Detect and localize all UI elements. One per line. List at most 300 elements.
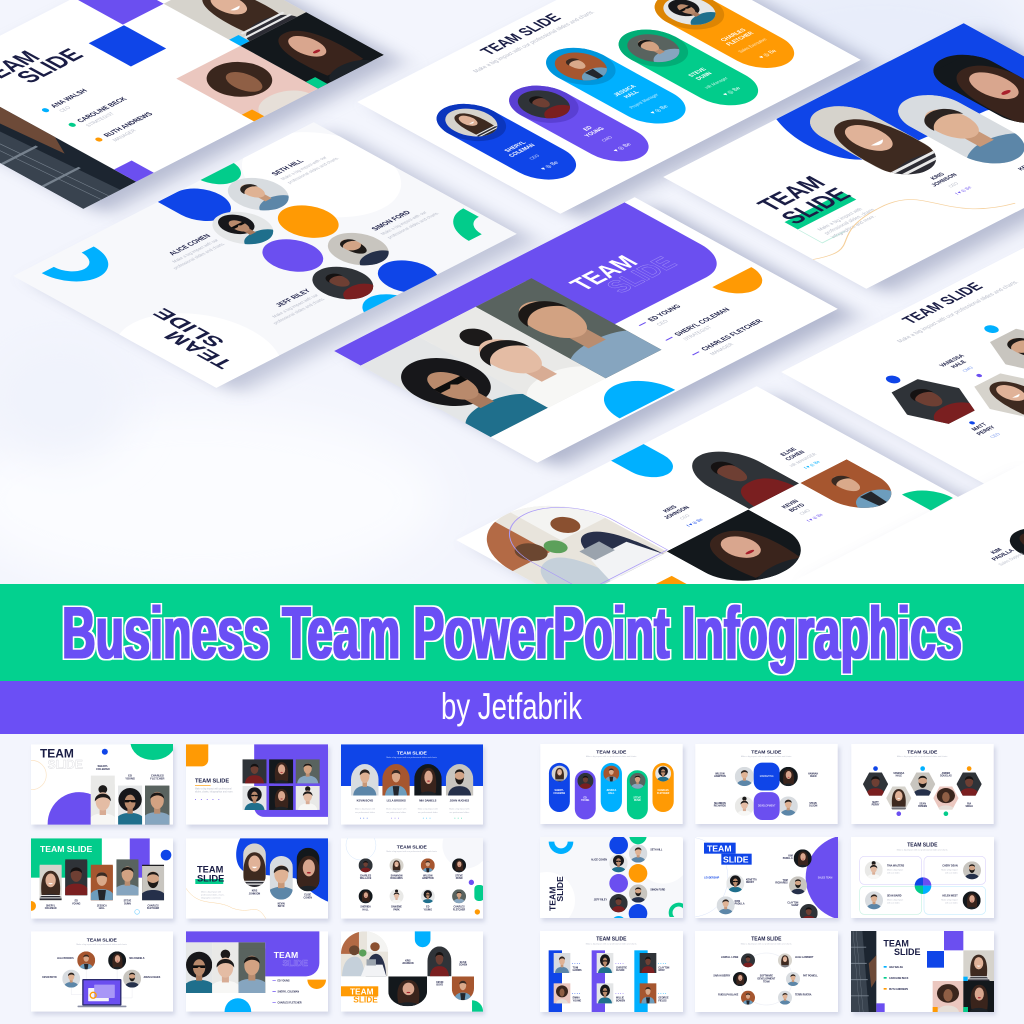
orange label bbox=[594, 576, 696, 629]
thumbnail: L3: TEAM SLIDE bbox=[397, 750, 428, 756]
pill orange bbox=[654, 0, 794, 68]
thumbnail: R8: DEVELOPMENT bbox=[757, 979, 776, 981]
thumbnail: R7: CLAYTON bbox=[658, 966, 670, 969]
thumbnail: L5: Make a big impact with bbox=[201, 890, 221, 893]
thumbnail: R1: HALL bbox=[608, 792, 615, 795]
names bbox=[894, 353, 1024, 441]
name labels: professional slides and charts. bbox=[386, 211, 440, 239]
thumbnail: R7: •••• bbox=[658, 992, 668, 996]
names: CMO bbox=[798, 508, 812, 516]
thumbnail: R3: DOUGLAS bbox=[940, 775, 952, 778]
thumbnail: L1 bbox=[17, 723, 216, 864]
thumbnail: R6: SEAN BAIRD bbox=[887, 895, 902, 898]
thumbnail: R1: ED bbox=[584, 797, 587, 799]
thumbnail: R2: TEAM SLIDE bbox=[751, 749, 782, 755]
photo dark circle bbox=[998, 522, 1024, 565]
thumbnail: R2: WILSON bbox=[715, 774, 725, 776]
description: Make a big impact with bbox=[816, 207, 865, 232]
name labels: professional slides and charts. bbox=[286, 156, 341, 184]
purple panel bbox=[334, 202, 717, 366]
thumbnail: L2 bbox=[186, 744, 330, 828]
thumbnail: R6: Make a big impact bbox=[941, 868, 958, 871]
thumbnail: L9: KEVIN bbox=[436, 982, 444, 984]
thumbnail: R7: CHRISTIE bbox=[616, 967, 627, 969]
thumbnail: R5: KIM bbox=[788, 855, 793, 857]
heading team slide rotated: TEAM bbox=[159, 328, 238, 371]
thumbnail: R7 bbox=[540, 931, 685, 1015]
thumbnail: R9: SLIDE bbox=[894, 947, 921, 957]
name labels: SETH HILL bbox=[271, 158, 307, 177]
names: VANESSA bbox=[939, 353, 967, 368]
slide: hexagon team bbox=[781, 216, 1024, 492]
thumbnail: R4: SETH HILL bbox=[650, 850, 663, 852]
thumbnail: R7: •••• bbox=[572, 961, 582, 965]
team list: ANA WALSH bbox=[49, 88, 90, 109]
thumbnail: R3: VANESSA bbox=[893, 772, 905, 775]
heading: SLIDE bbox=[775, 185, 858, 228]
thumbnail: R8: PAT POWELL bbox=[803, 975, 818, 978]
name labels: SIMON FORD bbox=[371, 210, 413, 232]
thumbnail: R2: Make a big impact with our professional slides and charts. bbox=[741, 755, 792, 758]
thumbnail: R1: YOUNG bbox=[581, 800, 590, 802]
purple square top bbox=[74, 0, 164, 25]
thumbnail: R1: TEAM SLIDE bbox=[596, 749, 627, 755]
thumbnail: L5: KRIS bbox=[252, 891, 258, 893]
thumbnail: L5: COHEN bbox=[304, 897, 312, 899]
slide: bottom right partial bbox=[790, 463, 1024, 595]
thumbnail: R5: REDDY bbox=[746, 882, 755, 884]
pill purple: ED bbox=[582, 126, 595, 132]
pill green: ♥ ◎ Be bbox=[722, 86, 743, 97]
thumbnail: R6: Make a big impact with our professional slides and charts. bbox=[897, 848, 948, 851]
thumbnail: R8: TEAM bbox=[763, 981, 770, 984]
thumbnail: R9 bbox=[850, 931, 996, 1015]
hexagon photos bbox=[876, 321, 1024, 451]
thumbnail: L6: CHARLES bbox=[453, 906, 465, 909]
names: HALE bbox=[950, 360, 969, 369]
role list: ED YOUNG bbox=[647, 304, 683, 323]
thumbnail: R3: BOWEN bbox=[918, 806, 927, 808]
thumbnail: L3: our professional slides bbox=[418, 811, 438, 814]
team list: MANAGER bbox=[112, 129, 139, 143]
thumbnail: R6: TINA WALTERS bbox=[887, 865, 905, 868]
thumbnail: L2: TEAM SLIDE bbox=[195, 779, 229, 785]
green ring bbox=[453, 208, 482, 241]
thumbnail: L9: BOYD bbox=[436, 985, 443, 987]
thumbnail: R7: YOUNG bbox=[573, 1000, 581, 1002]
name labels: KRIS bbox=[930, 172, 947, 181]
thumbnail: L5: SLIDE bbox=[197, 874, 224, 884]
heading: TEAM SLIDE bbox=[898, 280, 988, 327]
blue square bbox=[89, 25, 166, 66]
names bbox=[656, 442, 879, 559]
names: KEVIN bbox=[781, 499, 801, 510]
photo dark hair woman bbox=[240, 12, 384, 89]
thumbnail: L4: TEAM SLIDE bbox=[40, 844, 92, 854]
thumbnail: L4: SHERYL bbox=[46, 905, 56, 907]
thumbnail: L9: SLIDE bbox=[353, 994, 378, 1004]
thumbnail: L4 bbox=[0, 827, 204, 935]
pill green bbox=[618, 30, 758, 106]
thumbnail: R3: PERRY bbox=[872, 805, 880, 807]
thumbnail: L1: TEAM bbox=[40, 747, 74, 761]
team list: CAROLINE BECK bbox=[76, 96, 129, 124]
thumbnail: L9: COHEN bbox=[459, 965, 468, 967]
thumbnail: R5: TOM bbox=[783, 880, 788, 882]
thumbnail: L1: SLIDE bbox=[48, 757, 83, 771]
pill green: DUNN bbox=[695, 71, 714, 81]
pill cyan: JESSICA bbox=[613, 84, 639, 98]
thumbnail: L6: RICHARDS bbox=[390, 877, 403, 880]
name labels: Make a big impact with our bbox=[279, 155, 328, 181]
pill blue: COLEMAN bbox=[508, 143, 537, 158]
thumbnail: R8: RUDOLPH BLAKE bbox=[718, 993, 739, 996]
thumbnail: L8: ED YOUNG bbox=[277, 980, 290, 982]
thumbnail: R6: with our slides bbox=[945, 871, 958, 874]
role list bbox=[637, 289, 773, 362]
name labels: JOHNSON bbox=[931, 173, 959, 188]
thumbnail: R4: TEAM bbox=[548, 886, 558, 911]
thumbnail: L6: WILSON bbox=[423, 875, 433, 877]
photo man arch bbox=[675, 442, 799, 509]
thumbnail: L2: slides, charts, infographics and more. bbox=[195, 790, 234, 793]
photo curly hair man bbox=[361, 336, 548, 437]
photo brick arch bbox=[800, 459, 907, 516]
thumbnail: L4: YOUNG bbox=[72, 903, 81, 905]
thumbnail: L3: ••• bbox=[360, 816, 370, 820]
thumbnail: L1: COLEMAN bbox=[96, 767, 110, 771]
name labels: Make a big impact with our bbox=[171, 238, 220, 263]
pill cyan: HALL bbox=[623, 90, 642, 99]
thumbnail: R5: SHAW bbox=[791, 904, 799, 907]
thumbnail: R7: TEAM SLIDE bbox=[596, 937, 627, 943]
thumbnail: L6: SHANNON bbox=[391, 874, 403, 877]
outline arch bbox=[483, 494, 667, 592]
thumbnail: L8: CHARLES FLETCHER bbox=[277, 1001, 302, 1004]
thumbnail: R1: Make a big impact with our professional slides and charts. bbox=[586, 755, 637, 758]
names: f ♥ ◎ Be bbox=[685, 517, 704, 527]
thumbnail: R1: STEVE bbox=[633, 797, 641, 799]
thumbnail: L3: LELA BROOKS bbox=[387, 799, 406, 803]
thumbnail: L3: Make a big impact with bbox=[386, 808, 406, 811]
thumbnail: L8: TEAM bbox=[274, 950, 298, 960]
thumbnail: L3: ••• bbox=[454, 816, 464, 820]
thumbnail: L8: SLIDE bbox=[282, 958, 308, 968]
thumbnail: R7: EMMA bbox=[573, 997, 580, 1000]
green outline corner bbox=[798, 230, 845, 244]
thumbnail: R8: SARAH BERRY bbox=[713, 975, 731, 978]
thumbnail: R6 bbox=[851, 837, 996, 921]
thumbnail: R7: GEORGE bbox=[658, 998, 669, 1000]
thumbnail: L6: HAMPTON bbox=[422, 877, 434, 880]
names: CMO bbox=[961, 366, 975, 373]
thumbnail: R7: •••• bbox=[572, 992, 582, 996]
thumbnail: R2: RICHARDS bbox=[714, 805, 726, 808]
thumbnail: R3: SEAN bbox=[919, 802, 926, 805]
names: MATT bbox=[971, 422, 989, 432]
orange half circle bbox=[712, 267, 775, 300]
thumbnail: L8 bbox=[133, 904, 330, 1024]
team list: CEO bbox=[58, 106, 73, 113]
purple subtitle band bbox=[0, 681, 1024, 734]
thumbnail: R5: PADILLA bbox=[735, 903, 745, 906]
thumbnail: R9: RUTH ANDREWS bbox=[889, 988, 909, 991]
thumbnail: L2: ••••• bbox=[195, 798, 224, 802]
thumbnail: L9: KRIS bbox=[405, 960, 411, 962]
thumbnail: L5: ELISE bbox=[304, 895, 312, 897]
thumbnail: R1 bbox=[540, 744, 685, 827]
thumbnail: L6: FLETCHER bbox=[453, 909, 466, 911]
thumbnail: R8: TERRI RIVERA bbox=[795, 993, 812, 996]
thumbnail: L5: professional slides, charts, bbox=[201, 893, 225, 896]
thumbnail: L4: COLEMAN bbox=[45, 907, 57, 910]
thumbnail: R1: SHERYL bbox=[555, 790, 564, 792]
thumbnail: R4: ALICE COHEN bbox=[591, 859, 607, 862]
thumbnail: L5: infographics and more. bbox=[201, 896, 222, 899]
thumbnail: R4: SLIDE bbox=[555, 876, 565, 902]
role list: CHARLES FLETCHER bbox=[700, 319, 765, 352]
name labels: Make a big impact with our bbox=[379, 210, 428, 236]
thumbnail: R7: OLSON bbox=[616, 970, 625, 972]
pill cyan: Project Manager bbox=[628, 93, 660, 109]
thumbnail: L6: PARK bbox=[393, 908, 400, 911]
thumbnail: R1: JESSICA bbox=[606, 789, 617, 792]
pill orange: ♥ ◎ Be bbox=[758, 49, 779, 60]
thumbnail: L1: SHERYL bbox=[97, 764, 109, 768]
role list: CEO bbox=[656, 319, 670, 327]
thumbnail: R6: TEAM SLIDE bbox=[907, 843, 938, 849]
thumbnail: L4: CHARLES bbox=[147, 904, 159, 907]
thumbnail: R2 bbox=[695, 744, 840, 827]
thumbnail: R6: with our slides bbox=[887, 871, 900, 874]
thumbnail: L6: CHARLES bbox=[360, 874, 372, 877]
thumbnail: L1: ED bbox=[128, 773, 132, 777]
heading: TEAM bbox=[752, 173, 833, 215]
thumbnail: R2: OLSON bbox=[809, 806, 818, 808]
pill blue: SHERYL bbox=[504, 141, 528, 153]
thumbnail: L5 bbox=[186, 806, 369, 941]
thumbnail: R5: PADILLA bbox=[783, 857, 793, 860]
thumbnail: R7: BOWEN bbox=[616, 1000, 625, 1002]
oval photo woman bbox=[810, 106, 936, 174]
cyan arc bbox=[42, 246, 108, 282]
thumbnail: R5: CLAYTON bbox=[787, 901, 799, 904]
pill blue bbox=[436, 104, 576, 180]
thumbnail: L6: YOUNG bbox=[424, 909, 432, 911]
names: f ♥ ◎ Be bbox=[803, 460, 822, 470]
thumbnail: L7: JOHN HUGHES bbox=[143, 977, 161, 979]
names: KRIS bbox=[662, 505, 679, 514]
names: PERRY bbox=[976, 425, 997, 437]
thumbnail: L3: our professional slides bbox=[386, 811, 406, 814]
green shape bbox=[902, 483, 954, 510]
thumbnail: L3 bbox=[341, 744, 485, 828]
thumbnail: R8: Make a big impact with our professional slides and charts. bbox=[741, 942, 792, 945]
description: infographics and more. bbox=[830, 214, 878, 239]
blue blob bbox=[776, 23, 1024, 160]
pill orange: Sales Executive bbox=[737, 37, 768, 54]
thumbnail: R9: ANA WALSH bbox=[889, 966, 903, 969]
thumbnail: L3: Make a big impact with bbox=[449, 808, 469, 811]
thumbnail: R3: TEAM SLIDE bbox=[907, 749, 938, 755]
name kim padilla bbox=[983, 544, 1024, 566]
thumbnail: L4: HALL bbox=[99, 907, 106, 910]
thumbnail: L3: Make a big impact with our professional slides and charts. bbox=[386, 756, 438, 759]
thumbnail: L3: our professional slides bbox=[450, 811, 469, 814]
thumbnail: L5: KEVIN bbox=[278, 903, 285, 905]
pill purple: ♥ ◎ Be bbox=[613, 142, 633, 153]
thumbnail: R5: TEAM bbox=[707, 843, 732, 853]
name labels: professional slides and charts. bbox=[272, 297, 326, 325]
heading: TEAM SLIDE bbox=[477, 11, 566, 58]
thumbnail: R2: SHANNON bbox=[714, 802, 726, 805]
thumbnail: R5: LEADERSHIP bbox=[704, 876, 720, 879]
thumbnail: R1: COLEMAN bbox=[553, 792, 565, 795]
thumbnail: L3: MIA DANIELS bbox=[419, 799, 437, 803]
thumbnail: L3: ••• bbox=[391, 816, 401, 820]
thumbnail: R6: with our slides bbox=[887, 901, 900, 904]
subtitle: Make a big impact with our professional slides and charts. bbox=[472, 10, 597, 74]
green highlight bbox=[785, 192, 856, 229]
thumbnail: R8: LOWELL LOWE bbox=[721, 957, 739, 959]
thumbnail: R4: JEFF RILEY bbox=[594, 900, 607, 902]
thumbnail: R8: TEAM SLIDE bbox=[751, 937, 782, 943]
thumbnail: L7: LELA BROOKS bbox=[57, 957, 74, 960]
thumbnail: L3: JOHN HUGHES bbox=[450, 799, 469, 803]
building photo bbox=[0, 106, 136, 209]
thumbnail: L6: DANIEME bbox=[391, 906, 402, 909]
thumbnail: R3: AMBER bbox=[942, 772, 950, 775]
thumbnail: R4 bbox=[518, 827, 690, 931]
pill blue: ♥ ◎ Be bbox=[540, 161, 561, 171]
team list: STRATEGIST bbox=[85, 111, 117, 128]
thumbnail: R3: SINGH bbox=[965, 806, 973, 808]
pill purple bbox=[509, 86, 649, 162]
thumbnail: L4: STEVE bbox=[124, 901, 132, 903]
thumbnail: L5: TEAM bbox=[197, 865, 224, 875]
photo man blue shirt bbox=[476, 278, 662, 378]
thumbnail: L7: TEAM SLIDE bbox=[87, 937, 118, 943]
slide: purple header bbox=[334, 197, 865, 472]
pill orange: FLETCHER bbox=[725, 31, 757, 47]
team photo bbox=[456, 490, 668, 602]
thumbnail: R6: Make a big impact bbox=[887, 868, 904, 871]
thumbnail: R7: HARRIS bbox=[573, 969, 582, 972]
thumbnail: L7: KEVIN BOYD bbox=[42, 977, 57, 979]
heading: TEAM bbox=[564, 252, 645, 295]
slide: buildings team list bbox=[0, 0, 404, 218]
pill green: STEVE bbox=[687, 67, 709, 78]
names: ELISE bbox=[780, 447, 799, 457]
thumbnail: L6 bbox=[341, 822, 489, 922]
name labels: professional slides and charts. bbox=[172, 242, 226, 270]
thumbnail: L3: ••• bbox=[423, 816, 433, 820]
pill cyan: ♥ ◎ Be bbox=[649, 104, 670, 115]
pill purple: CMO bbox=[600, 135, 614, 142]
thumbnail: R3 bbox=[851, 744, 996, 827]
thumbnail: R2: HANNAH bbox=[808, 773, 818, 776]
pill green: HR Manager bbox=[703, 76, 730, 90]
thumbnail: R6: Make a big impact bbox=[941, 898, 958, 901]
small accent squares bbox=[114, 35, 328, 182]
thumbnail: R5 bbox=[695, 835, 891, 922]
thumbnail: R7: •••• bbox=[615, 961, 625, 965]
names: CEO bbox=[678, 513, 691, 520]
name kim padilla: PADILLA bbox=[991, 548, 1017, 562]
thumbnail: R3: HALE bbox=[896, 775, 902, 778]
heading team slide: SLIDE bbox=[10, 45, 89, 87]
thumbnail: L9: JOHNSON bbox=[402, 963, 414, 965]
name labels bbox=[930, 165, 1024, 195]
thumbnail: R8: LEAH LAMBERT bbox=[795, 956, 814, 959]
thumbnail: R2: MARKETING bbox=[760, 775, 774, 778]
names: CEO bbox=[989, 432, 1002, 439]
slide: arch photos bbox=[456, 384, 980, 660]
circle column bbox=[158, 163, 438, 312]
thumbnail: L6: ED bbox=[426, 907, 430, 909]
thumbnail: R1: FLETCHER bbox=[657, 793, 670, 795]
thumbnail: R4: SIMON FORD bbox=[650, 890, 666, 892]
thumbnail: L6: STEVE bbox=[455, 875, 463, 877]
thumbnail: R8: SOFTWARE bbox=[760, 975, 773, 978]
thumbnail: L3: Make a big impact with bbox=[418, 808, 438, 811]
photo afro woman bbox=[176, 46, 318, 121]
thumbnail: R8 bbox=[695, 931, 840, 1015]
name labels bbox=[170, 156, 439, 325]
team list: RUTH ANDREWS bbox=[103, 111, 155, 138]
thumbnail: L6: TEAM SLIDE bbox=[397, 844, 428, 850]
thumbnail: R3: MATT bbox=[872, 801, 879, 804]
thumbnail: R5: SLIDE bbox=[723, 854, 749, 864]
thumbnail: R2: CHEN bbox=[810, 776, 817, 778]
pill orange: CHARLES bbox=[720, 28, 748, 43]
outline word: SLIDE bbox=[601, 253, 684, 297]
cyan shape bbox=[611, 444, 683, 483]
thumbnail: R5: KRIS bbox=[735, 901, 741, 903]
names: BOYD bbox=[788, 503, 807, 513]
subtitle by jetfabrik: by Jetfabrik bbox=[441, 686, 582, 727]
role list: STRATEGIST bbox=[682, 325, 715, 342]
thumbnail: R7: GRAY bbox=[658, 969, 665, 972]
names: HR MANAGER bbox=[788, 452, 819, 468]
oval photo dark woman bbox=[933, 54, 1024, 123]
thumbnail: L2: Make a big impact with professional bbox=[195, 787, 232, 790]
thumbnail: L9: TEAM bbox=[350, 987, 374, 997]
pill purple: YOUNG bbox=[584, 126, 607, 138]
thumbnail: R9: CAROLINE BECK bbox=[889, 977, 909, 980]
cyan half circle bbox=[586, 372, 675, 418]
thumbnail: R1: CHARLES bbox=[658, 789, 669, 792]
thumbnail: R3: Make a big impact with our professional slides and charts. bbox=[897, 755, 948, 758]
thumbnail: L4: JESSICA bbox=[97, 904, 107, 907]
thumbnail: R5: RICHARDS bbox=[775, 882, 788, 885]
subtitle: Make a big impact with our professional slides and charts. bbox=[896, 280, 1021, 344]
team list bbox=[42, 88, 152, 142]
role list: SHERYL COLEMAN bbox=[674, 307, 732, 337]
thumbnail: L6: Make a big impact with our professional slides and charts. bbox=[386, 850, 438, 853]
name labels: JEFF RILEY bbox=[275, 288, 313, 308]
thumbnail: R6: with our slides bbox=[945, 901, 958, 904]
thumbnail: R6: CHERY DEAN bbox=[942, 865, 958, 868]
thumbnail: R7: TONI bbox=[573, 967, 579, 969]
thumbnail: L7: MIA DANIELS bbox=[129, 957, 145, 960]
name labels: CEO bbox=[947, 181, 960, 188]
photo woman with bun bbox=[418, 306, 606, 408]
thumbnail: R7: WILLIE bbox=[616, 998, 624, 1000]
slide: circles team bbox=[31, 123, 542, 396]
thumbnail: R9: TEAM bbox=[883, 939, 909, 949]
thumbnail: L6: SHERIDA bbox=[360, 906, 371, 909]
